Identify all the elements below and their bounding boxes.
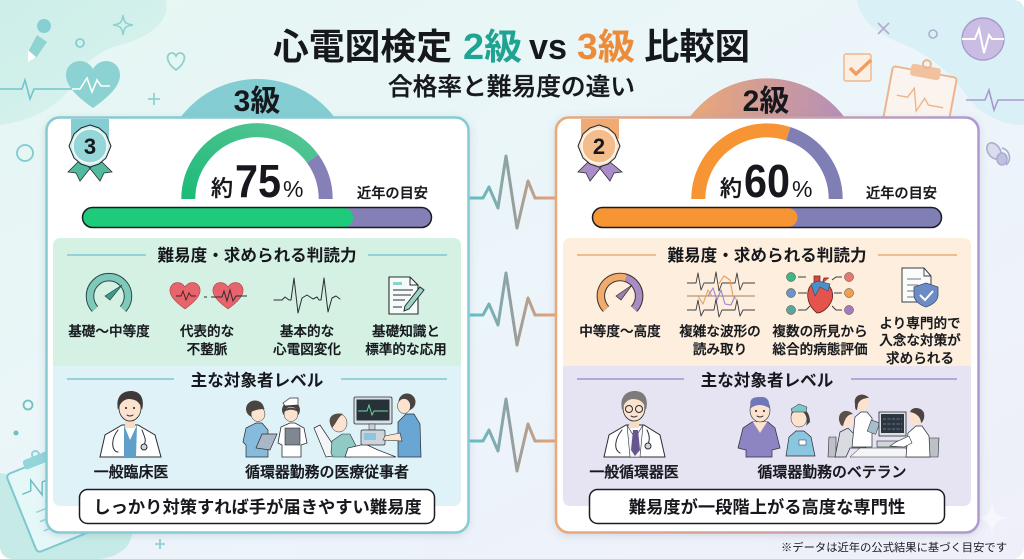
text: 複数の所見から [772,323,868,339]
monitor [879,412,906,436]
icon: gauge [90,277,128,309]
gauge: 60%: 60 [744,155,790,207]
subtitle: 合格率と難易度の違い [388,73,635,101]
text: 一般臨床医 [94,464,168,481]
text: 基礎知識と [372,323,440,339]
text [879,316,961,366]
decoration: top-right blob [857,0,1024,125]
panel: 2級 [556,78,978,532]
title: 3級 [577,26,635,67]
nurse 2 [278,423,307,457]
icon: plus [148,93,160,105]
gauge: 75% [188,130,326,207]
gauge: 75%: % [283,176,303,202]
icon: small circle right [929,30,937,38]
text [772,323,868,357]
heading: 難易度・求められる判読力 [157,245,357,265]
icon: cross [878,23,889,34]
heading: 主な対象者レベル [191,370,324,390]
icon: clipboard lower left [2,436,108,553]
icon: heart network [786,272,854,314]
icon: purple ECG circle [962,18,1004,60]
gauge: 75%: 75 [235,155,281,207]
illustration: veteran staff [738,395,939,457]
icon: complex waveforms [687,272,755,317]
text: 中等度〜高度 [579,323,661,339]
icon: document and pencil [389,277,424,314]
standing doctor [852,412,872,447]
title: 2級 [463,26,522,67]
section: 対象者 [563,366,971,506]
gauge: 60% [698,130,836,207]
nurse 3 [398,414,421,457]
illustration: cardiologist [604,391,665,457]
icon: checkbox [844,54,871,81]
title: 比較図 [644,26,750,67]
decoration: top-left blob [0,0,167,125]
icon: gauge [601,277,639,309]
illustration: medical staff [243,394,421,457]
icon: ECG trace [274,278,340,313]
panel: 3級 [46,79,468,533]
text: 循環器勤務の医療従事者 [245,463,409,481]
icon: large heart with ECG [0,61,120,108]
icon: small circle [76,39,84,47]
heading: 主な対象者レベル [701,370,834,390]
text: より専門的で [879,316,961,331]
icon: sparkle bottom right [977,501,1007,535]
tab: 2級 dome [689,78,845,118]
footnote: ※データは近年の公式結果に基づく目安です [781,540,1007,554]
seated doctor [906,426,930,457]
icon: outline heart [168,53,184,70]
text: 読み取り [693,341,747,357]
icon: stethoscope right [984,140,1009,165]
text: 求められる [886,351,954,366]
gauge: 60%: % [792,176,812,202]
monitor [354,397,392,424]
text: 一般循環器医 [589,464,679,481]
text: 不整脈 [187,342,228,357]
section: 対象者 [53,366,461,506]
text: 複雑な波形の [679,323,761,339]
icon: capsule pencil [28,19,51,62]
badge: 3: 3 [84,134,96,159]
card [46,118,468,532]
card [556,118,978,532]
icon: document and shield [902,268,938,307]
text: 心電図変化 [273,342,341,357]
table [850,448,925,457]
callout: 難易度が一段階上がる高度な専門性 [629,497,905,517]
section: 難易度 [563,238,971,366]
illustration: doctor [100,391,161,457]
section: 難易度 [53,238,461,366]
text: 基礎〜中等度 [68,323,150,339]
seated colleague [835,428,866,457]
badge: 2 [578,119,622,181]
badge: 3 [68,119,112,181]
bar: 75% [82,208,432,228]
heading: 難易度・求められる判読力 [667,245,867,265]
callout: しっかり対策すれば手が届きやすい難易度 [93,497,422,517]
title: vs [529,26,567,67]
bar: 60% [592,208,942,228]
decoration: bottom-left blob [0,473,133,559]
bed and patient [314,425,340,457]
text [273,323,341,357]
tab: 3級 dome: 3級 [234,85,280,118]
chairs [828,437,939,457]
callout [590,490,944,524]
icon: sparkle [113,15,133,35]
text: 近年の目安: 近年の目安 [866,185,937,202]
text [679,323,761,357]
text: 循環器勤務のベテラン [758,463,906,481]
text: 代表的な [180,323,234,339]
nurse [786,431,815,456]
text: 入念な対策が [879,332,961,348]
text: 標準的な応用 [365,342,447,357]
callout [80,490,434,524]
icon: dot [14,430,18,436]
text: 基本的な [280,323,334,339]
text [365,323,447,357]
tab: 3級 dome [180,79,335,118]
connector: ECG lines [469,156,555,471]
gauge: 75%: 約 [211,176,233,201]
title: 心電図検定 [273,26,452,67]
badge: 2: 2 [593,134,605,159]
tab: 2級 dome: 2級 [743,85,789,118]
icon: circle lower left [24,400,32,410]
title [273,26,750,67]
icon: clipboard right [878,54,959,157]
icon: ECG line right [966,90,1024,110]
nurse 1 [243,423,268,457]
text: 総合的病態評価 [772,341,868,357]
gauge: 60%: 約 [720,176,742,201]
surgeon [738,422,780,457]
icon: circle left [17,145,33,161]
icon: hearts [170,283,247,309]
text: 近年の目安: 近年の目安 [357,185,428,202]
icon: plus bottom [155,539,165,549]
text [180,323,234,357]
